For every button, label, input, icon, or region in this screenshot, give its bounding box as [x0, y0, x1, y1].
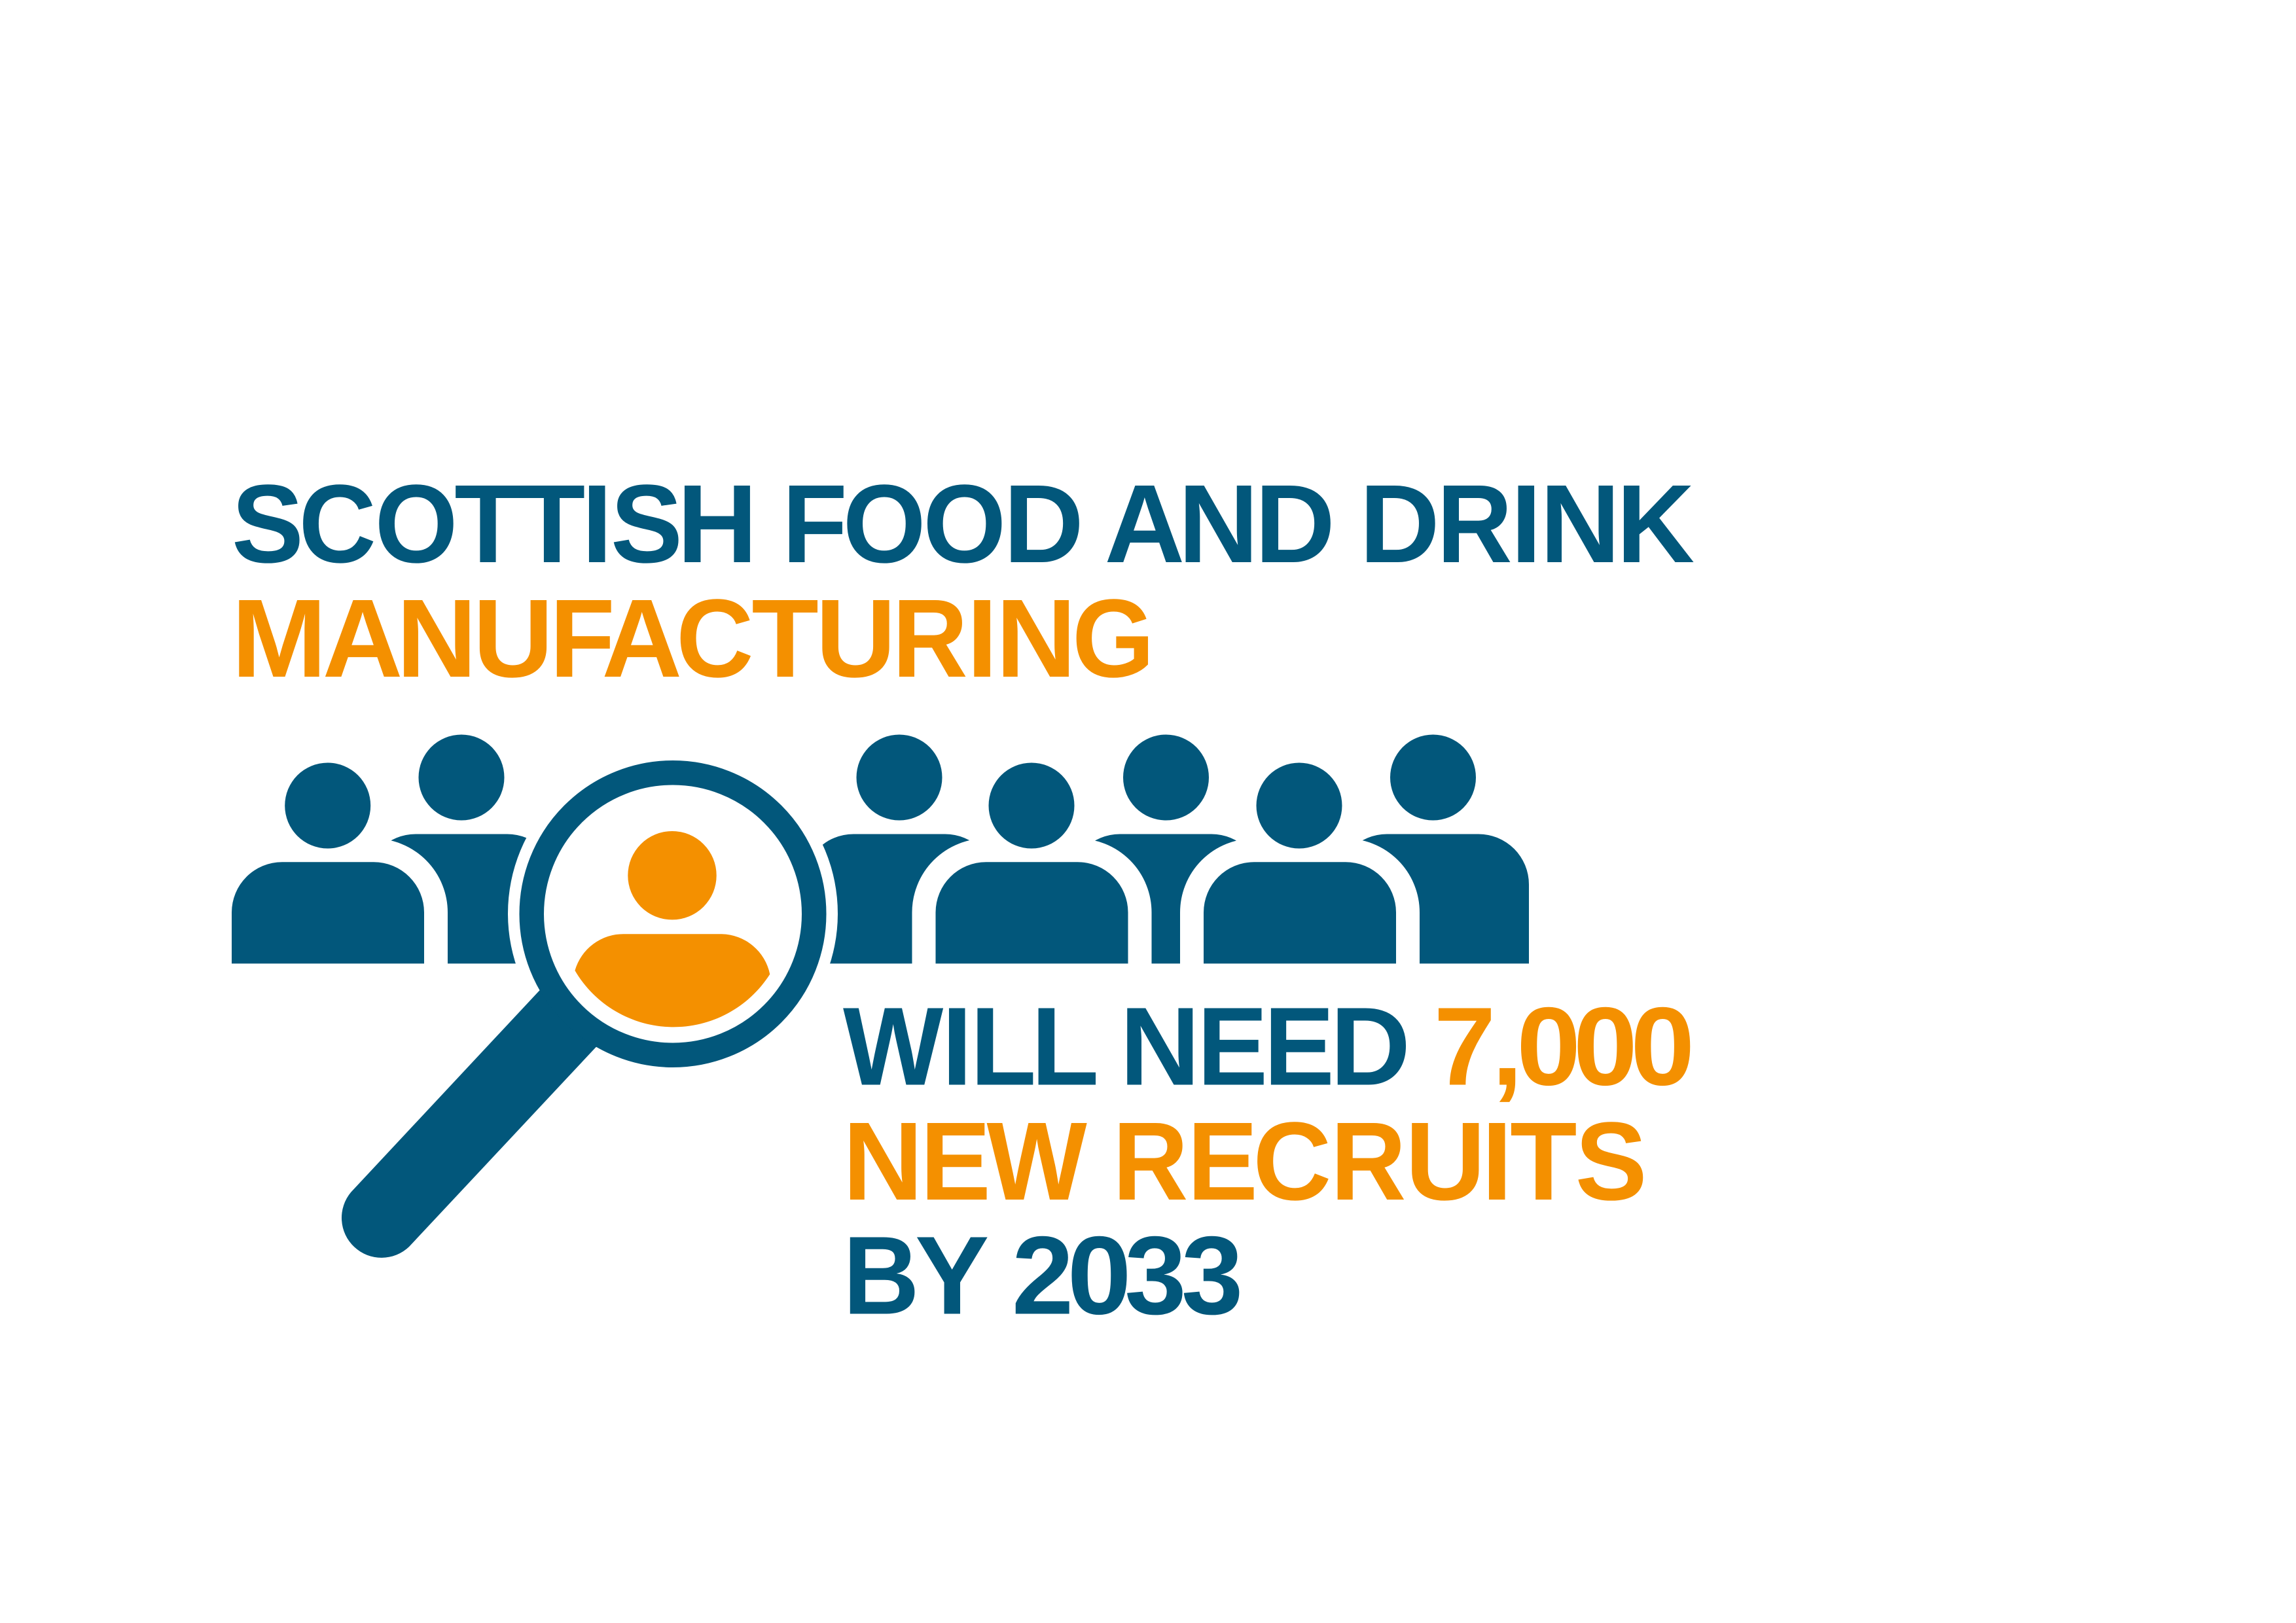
title line 2: N	[996, 577, 1076, 701]
title line 1: D	[1359, 462, 1440, 586]
title line 1: C	[298, 462, 376, 586]
title line 1: S	[232, 462, 304, 586]
text line: will need 7,000: 7	[1434, 984, 1496, 1109]
title line 1: D	[1003, 462, 1084, 586]
title line 2: T	[751, 577, 819, 701]
title line 2: A	[323, 577, 403, 701]
heads	[285, 734, 1476, 848]
text line: will need 7,000: N	[1120, 984, 1200, 1109]
title: Scottish Food and Drink Manufacturing	[232, 462, 1695, 701]
text line: will need 7,000: ,	[1492, 984, 1523, 1109]
title line 1: O	[923, 462, 1006, 586]
text line: by 2033: 3	[1181, 1213, 1243, 1338]
title line 2: A	[601, 577, 682, 701]
title line 1: R	[1437, 462, 1513, 586]
text line: will need 7,000: E	[1197, 984, 1268, 1109]
text line: will need 7,000: I	[942, 984, 973, 1109]
title line 1: T	[454, 462, 522, 586]
title line 1: H	[677, 462, 757, 586]
title line 1: I	[582, 462, 613, 586]
title line 2: U	[473, 577, 553, 701]
text line: new recruits: S	[1575, 1099, 1647, 1224]
title line 2: R	[892, 577, 968, 701]
text line: will need 7,000: 0	[1630, 984, 1695, 1109]
lens white halo	[508, 749, 838, 1079]
text line: will need 7,000: L	[970, 984, 1036, 1109]
text line: by 2033: 2	[1012, 1213, 1073, 1338]
title line 1: I	[1511, 462, 1541, 586]
title line 2: M	[232, 577, 327, 701]
title line 1: N	[1178, 462, 1259, 586]
text line: new recruits: R	[1113, 1099, 1188, 1224]
magnifier handle	[342, 969, 628, 1258]
title line 2: I	[967, 577, 997, 701]
title line 2: G	[1072, 577, 1155, 701]
text line: will need 7,000: L	[1031, 984, 1097, 1109]
title line 1: K	[1617, 462, 1695, 586]
text line: by 2033: B	[843, 1213, 920, 1338]
text line: by 2033: Y	[915, 1213, 988, 1338]
text line: new recruits: I	[1482, 1099, 1513, 1224]
title line 2: F	[550, 577, 615, 701]
text line: will need 7,000: E	[1264, 984, 1335, 1109]
title line 1: N	[1540, 462, 1621, 586]
title line 1: S	[611, 462, 683, 586]
text line: new recruits: W	[987, 1099, 1087, 1224]
back row bodies	[365, 834, 1529, 963]
title line 2: N	[397, 577, 477, 701]
title line 2: C	[676, 577, 754, 701]
text line: will need 7,000: 0	[1573, 984, 1638, 1109]
title line 1: A	[1105, 462, 1185, 586]
text line: new recruits: E	[1187, 1099, 1258, 1224]
front row bodies with white outline	[232, 862, 1396, 963]
text line: will need 7,000: W	[843, 984, 944, 1109]
statement text	[843, 984, 1695, 1338]
title line 1: O	[843, 462, 926, 586]
title line 1: F	[782, 462, 848, 586]
text line: by 2033: 3	[1124, 1213, 1187, 1338]
text line: new recruits: E	[920, 1099, 991, 1224]
text line: will need 7,000: 0	[1516, 984, 1581, 1109]
icon: highlighted orange person	[575, 831, 770, 1027]
lens ring	[531, 773, 814, 1055]
text line: will need 7,000: D	[1330, 984, 1410, 1109]
text line: new recruits: T	[1510, 1099, 1577, 1224]
crowd of people icons	[232, 734, 1529, 963]
text line: new recruits: N	[843, 1099, 923, 1224]
icon: magnifying glass	[342, 749, 838, 1258]
text line: new recruits: C	[1253, 1099, 1331, 1224]
title line 1: O	[375, 462, 458, 586]
title line 2: U	[816, 577, 896, 701]
title line 1: T	[518, 462, 585, 586]
text line: by 2033: 0	[1067, 1213, 1132, 1338]
text line: new recruits: R	[1331, 1099, 1406, 1224]
title line 1: D	[1255, 462, 1335, 586]
text line: new recruits: U	[1405, 1099, 1486, 1224]
